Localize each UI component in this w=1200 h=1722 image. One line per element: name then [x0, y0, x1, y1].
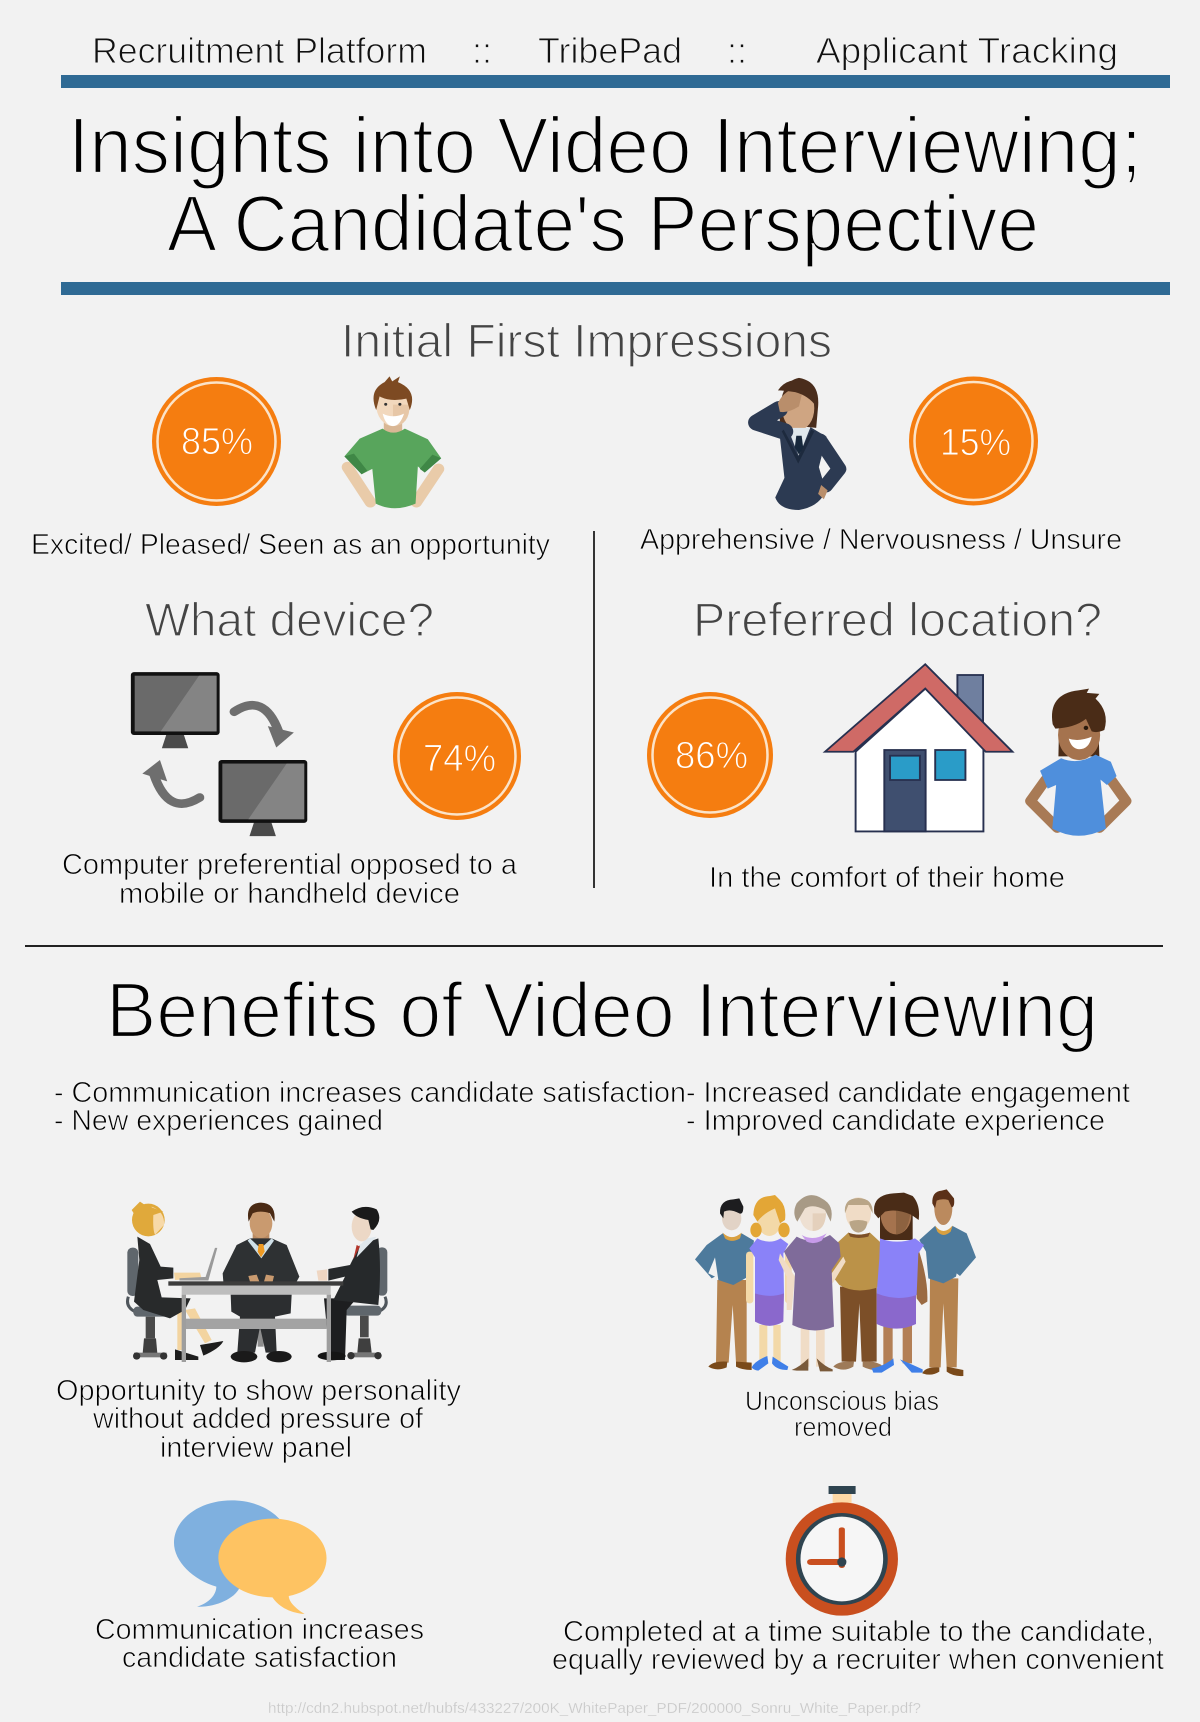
caption: completed at suitable time	[552, 1616, 1164, 1676]
person 5	[872, 1193, 927, 1373]
caption: unconscious bias	[745, 1386, 939, 1442]
person 6	[919, 1189, 976, 1376]
caption: completed at suitable time: equally reviewed by a recruiter when convenient	[552, 1644, 1164, 1676]
right man	[317, 1207, 387, 1360]
stat circle: 15%: 15%	[940, 422, 1011, 464]
icon: speech bubbles	[174, 1500, 327, 1614]
person 1	[695, 1198, 754, 1370]
heading: preferred location: Preferred location?	[693, 593, 1102, 646]
caption: show personality: without added pressure of	[92, 1403, 424, 1435]
bullet list right: - Improved candidate experience	[686, 1105, 1105, 1137]
caption: communication: candidate satisfaction	[122, 1642, 397, 1674]
caption: computer preferential: Computer preferential opposed to a	[62, 849, 518, 881]
caption: communication	[95, 1614, 424, 1674]
icon: two monitors with swap arrows	[131, 672, 307, 836]
heading: initial first impressions: Initial First Impressions	[341, 314, 832, 367]
caption: unconscious bias: removed	[794, 1412, 892, 1442]
header strip: ::	[472, 30, 492, 71]
stat circle: 74%	[393, 692, 521, 820]
illustration: diverse crowd of candidates	[695, 1189, 976, 1376]
horizontal divider	[25, 945, 1163, 947]
bullet list left: - New experiences gained	[54, 1105, 383, 1137]
bullet list right	[686, 1077, 1130, 1137]
title: A Candidate's Perspective	[167, 179, 1039, 268]
header strip: Applicant Tracking	[816, 30, 1118, 71]
icon: worried woman in suit	[757, 378, 839, 510]
header strip: TribePad	[538, 30, 682, 71]
icon: house	[825, 664, 1012, 831]
source url: http://cdn2.hubspot.net/hubfs/433227/200K_WhitePaper_PDF/200000_Sonru_White_Paper.pdf?	[268, 1700, 921, 1717]
header strip: ::	[727, 30, 747, 71]
caption: show personality: Opportunity to show personality	[56, 1375, 461, 1407]
heading: what device: What device?	[145, 593, 434, 646]
title	[61, 101, 1170, 295]
caption: communication: Communication increases	[95, 1614, 424, 1646]
icon: smiling woman in blue shirt	[1030, 689, 1126, 836]
left woman	[132, 1202, 223, 1360]
vertical divider	[593, 531, 595, 888]
stat circle: 85%: 85%	[181, 421, 253, 463]
caption: show personality	[56, 1375, 461, 1464]
icon: stopwatch clock	[786, 1486, 898, 1616]
caption: computer preferential	[62, 849, 518, 910]
bullet list left: - Communication increases candidate satisfaction	[54, 1077, 686, 1109]
caption: apprehensive: Apprehensive / Nervousness / Unsure	[640, 524, 1122, 556]
header strip	[61, 30, 1170, 88]
caption: show personality: interview panel	[160, 1432, 352, 1464]
caption: unconscious bias: Unconscious bias	[745, 1386, 939, 1416]
stat circle: 86%: 86%	[675, 735, 748, 777]
stat circle: 15%	[909, 376, 1038, 506]
caption: comfort of home: In the comfort of their home	[709, 862, 1065, 894]
person 3	[779, 1195, 846, 1371]
centre man	[223, 1203, 299, 1362]
table	[168, 1281, 343, 1362]
caption: completed at suitable time: Completed at a time suitable to the candidate,	[563, 1616, 1154, 1648]
person 4	[828, 1197, 891, 1371]
left chair	[127, 1248, 171, 1360]
caption: computer preferential: mobile or handheld device	[119, 878, 460, 910]
stat circle: 86%	[647, 692, 773, 818]
heading: benefits: Benefits of Video Interviewing	[106, 966, 1098, 1054]
title: Insights into Video Interviewing;	[68, 101, 1142, 190]
stat circle: 74%: 74%	[423, 738, 496, 780]
caption: excited: Excited/ Pleased/ Seen as an opportunity	[31, 529, 550, 561]
header strip: Recruitment Platform	[92, 30, 427, 71]
bullet list right: - Increased candidate engagement	[686, 1077, 1130, 1109]
stat circle: 85%	[152, 377, 281, 506]
bullet list left	[54, 1077, 686, 1137]
person 2	[746, 1195, 792, 1371]
illustration: interview panel at a table	[127, 1202, 387, 1362]
icon: happy man in green shirt	[344, 376, 441, 508]
